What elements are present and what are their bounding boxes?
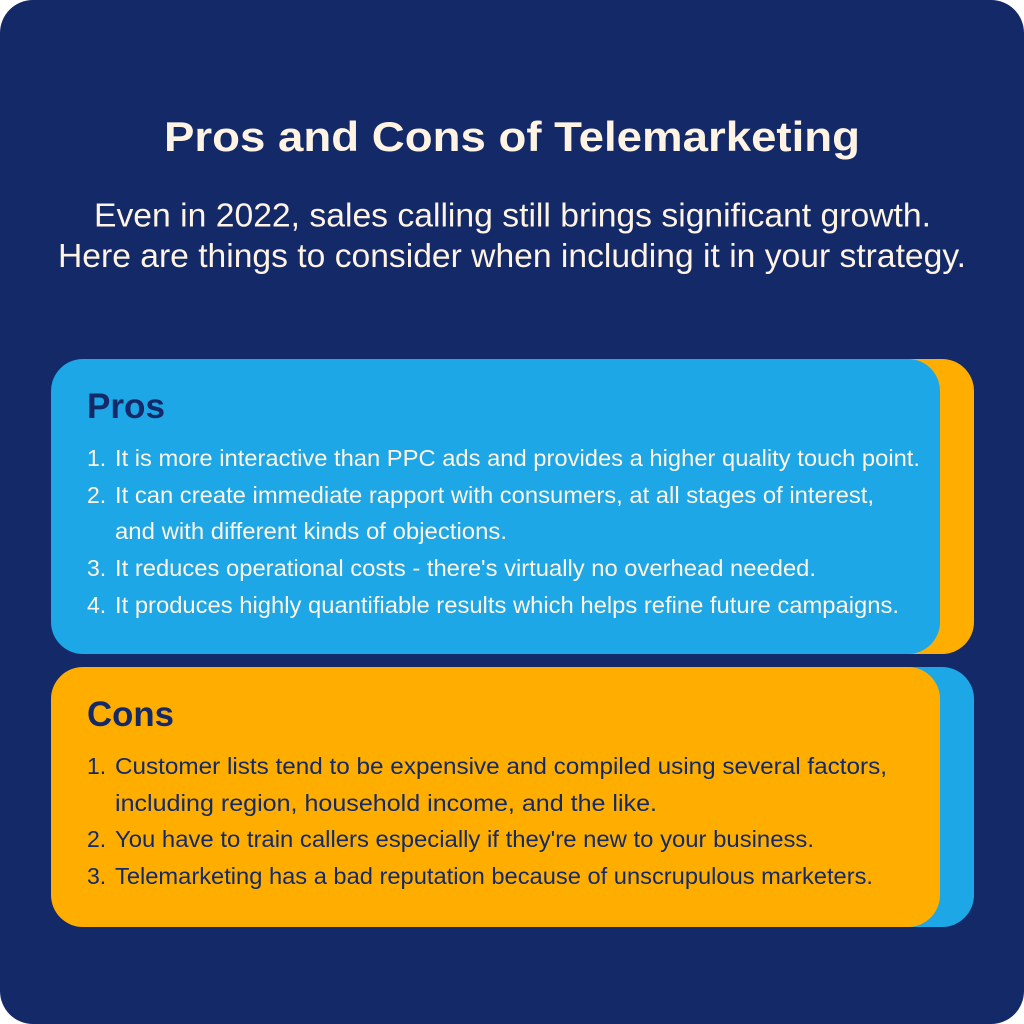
panel: pros bbox=[51, 359, 974, 654]
cons back tab bbox=[700, 667, 974, 927]
pros list: and with different kinds of objections. bbox=[115, 518, 507, 544]
pros list: It can create immediate rapport with consumers, at all stages of interest, bbox=[115, 482, 874, 508]
cons list: Customer lists tend to be expensive and compiled using several factors, bbox=[115, 753, 887, 779]
pros list: 4. bbox=[87, 592, 106, 618]
pros list: It is more interactive than PPC ads and provides a higher quality touch point. bbox=[115, 445, 920, 471]
pros back tab bbox=[700, 359, 974, 654]
cons list: 3. bbox=[87, 863, 106, 889]
title: Pros and Cons of Telemarketing bbox=[164, 113, 860, 160]
cons list: 2. bbox=[87, 826, 106, 852]
subtitle: Even in 2022, sales calling still brings significant growth. bbox=[94, 196, 931, 234]
pros card bbox=[51, 359, 940, 654]
pros list: 2. bbox=[87, 482, 106, 508]
cons list: Telemarketing has a bad reputation because of unscrupulous marketers. bbox=[115, 863, 873, 889]
cons list: You have to train callers especially if they're new to your business. bbox=[115, 826, 814, 852]
pros list: It produces highly quantifiable results which helps refine future campaigns. bbox=[115, 592, 899, 618]
pros list: 1. bbox=[87, 445, 106, 471]
pros heading: Pros bbox=[87, 387, 165, 426]
pros list bbox=[87, 445, 920, 618]
pros list: 3. bbox=[87, 555, 106, 581]
cons list: 1. bbox=[87, 753, 106, 779]
subtitle: Here are things to consider when including it in your strategy. bbox=[58, 237, 966, 274]
panel: cons bbox=[51, 667, 974, 927]
cons list: including region, household income, and the like. bbox=[115, 790, 657, 816]
pros list: It reduces operational costs - there's virtually no overhead needed. bbox=[115, 555, 816, 581]
cons list bbox=[87, 753, 887, 889]
cons card bbox=[51, 667, 940, 927]
cons heading: Cons bbox=[87, 695, 174, 734]
subtitle bbox=[58, 196, 966, 274]
